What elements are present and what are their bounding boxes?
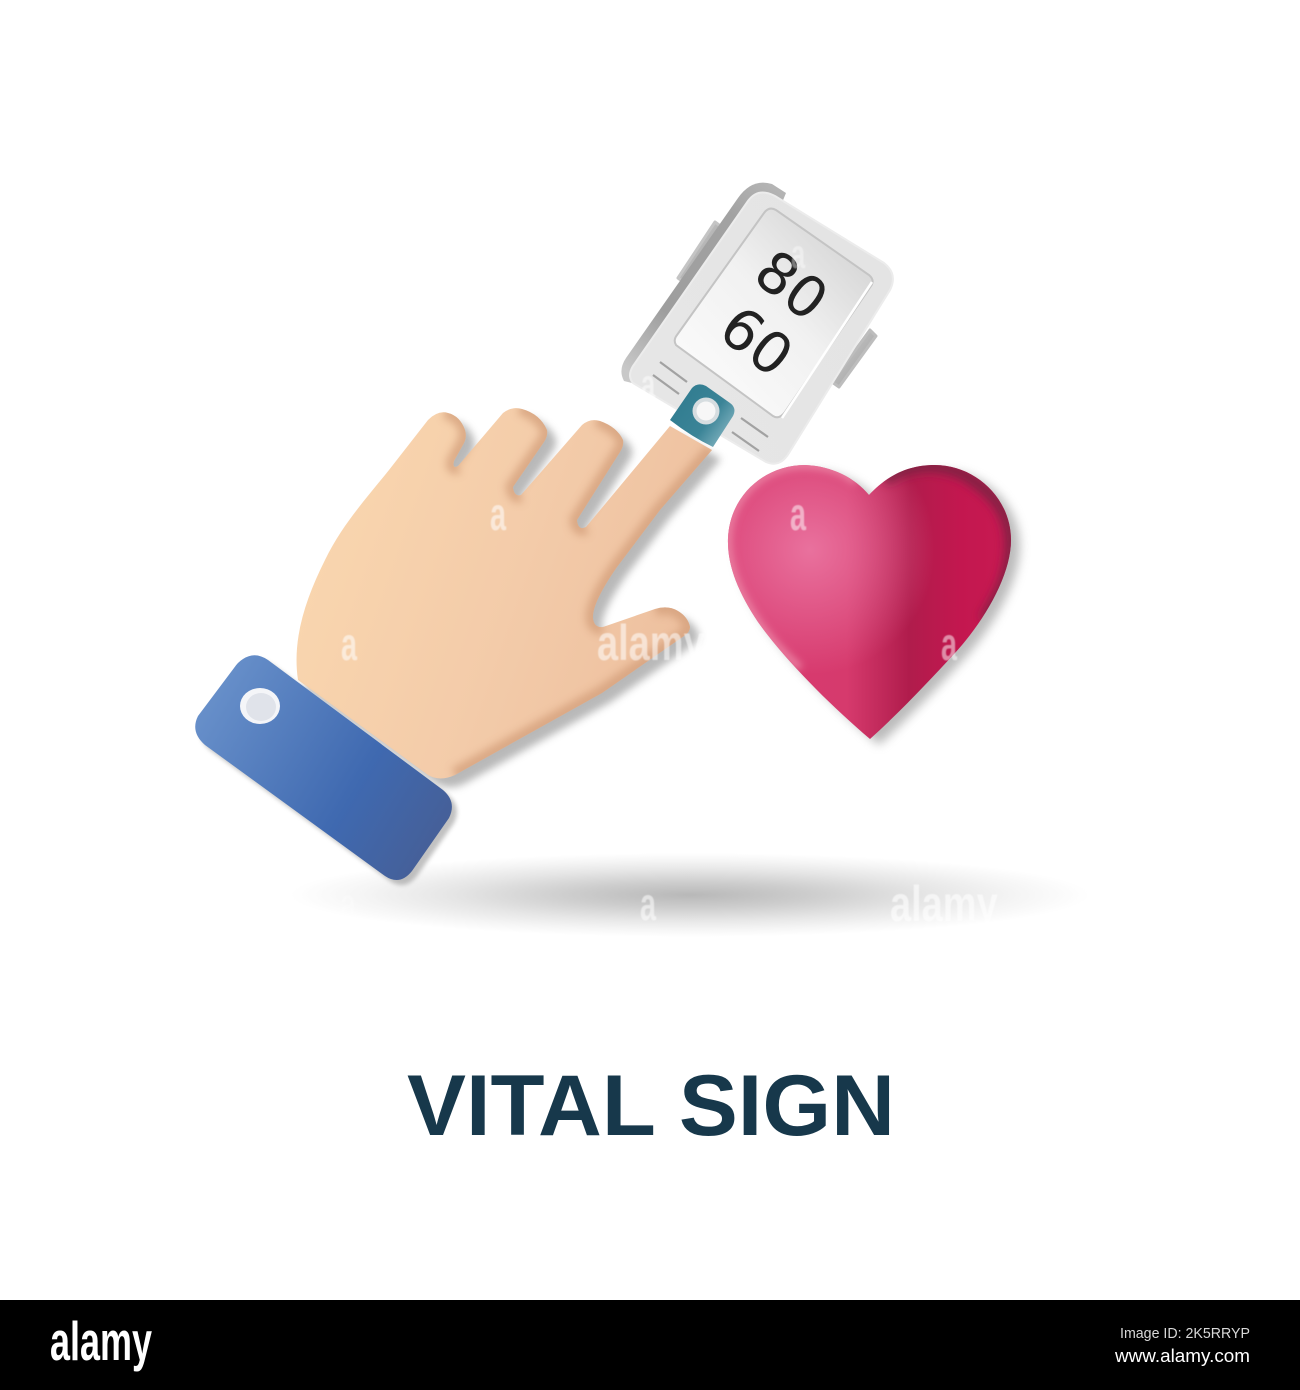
footer logo: alamy <box>50 1310 152 1372</box>
footer bar <box>0 1300 1300 1390</box>
watermark marks: a <box>490 489 506 541</box>
title: VITAL SIGN <box>407 1058 895 1154</box>
icon: finger clip <box>670 384 734 447</box>
watermark marks: a <box>341 619 357 671</box>
watermark marks: a <box>941 619 957 671</box>
watermark marks: a <box>340 879 356 931</box>
website: www.alamy.com <box>1114 1346 1250 1366</box>
icon: blood pressure device <box>621 183 893 464</box>
cuff button <box>240 688 280 724</box>
watermark marks: a <box>641 362 656 408</box>
watermark marks: a <box>791 232 806 278</box>
device face <box>630 192 893 464</box>
icon: hand <box>297 407 712 778</box>
watermark marks: alamy <box>890 877 998 932</box>
watermark marks: a <box>640 879 656 931</box>
right side button <box>832 330 876 387</box>
device body edge <box>621 183 786 400</box>
device screen <box>675 209 873 417</box>
watermark marks: alamy <box>597 616 705 671</box>
image id: Image ID: 2K5RRYP <box>1120 1325 1250 1342</box>
ground shadow <box>290 853 1090 937</box>
icon: heart <box>728 465 1020 745</box>
left side button <box>678 222 723 284</box>
reading: 80: 80 <box>742 238 840 334</box>
device grille lines <box>653 362 768 451</box>
hand shadow <box>306 417 721 788</box>
icon: shirt cuff <box>195 655 457 885</box>
watermark marks <box>340 232 998 932</box>
reading: 60: 60 <box>707 294 805 390</box>
watermark marks: a <box>790 489 806 541</box>
